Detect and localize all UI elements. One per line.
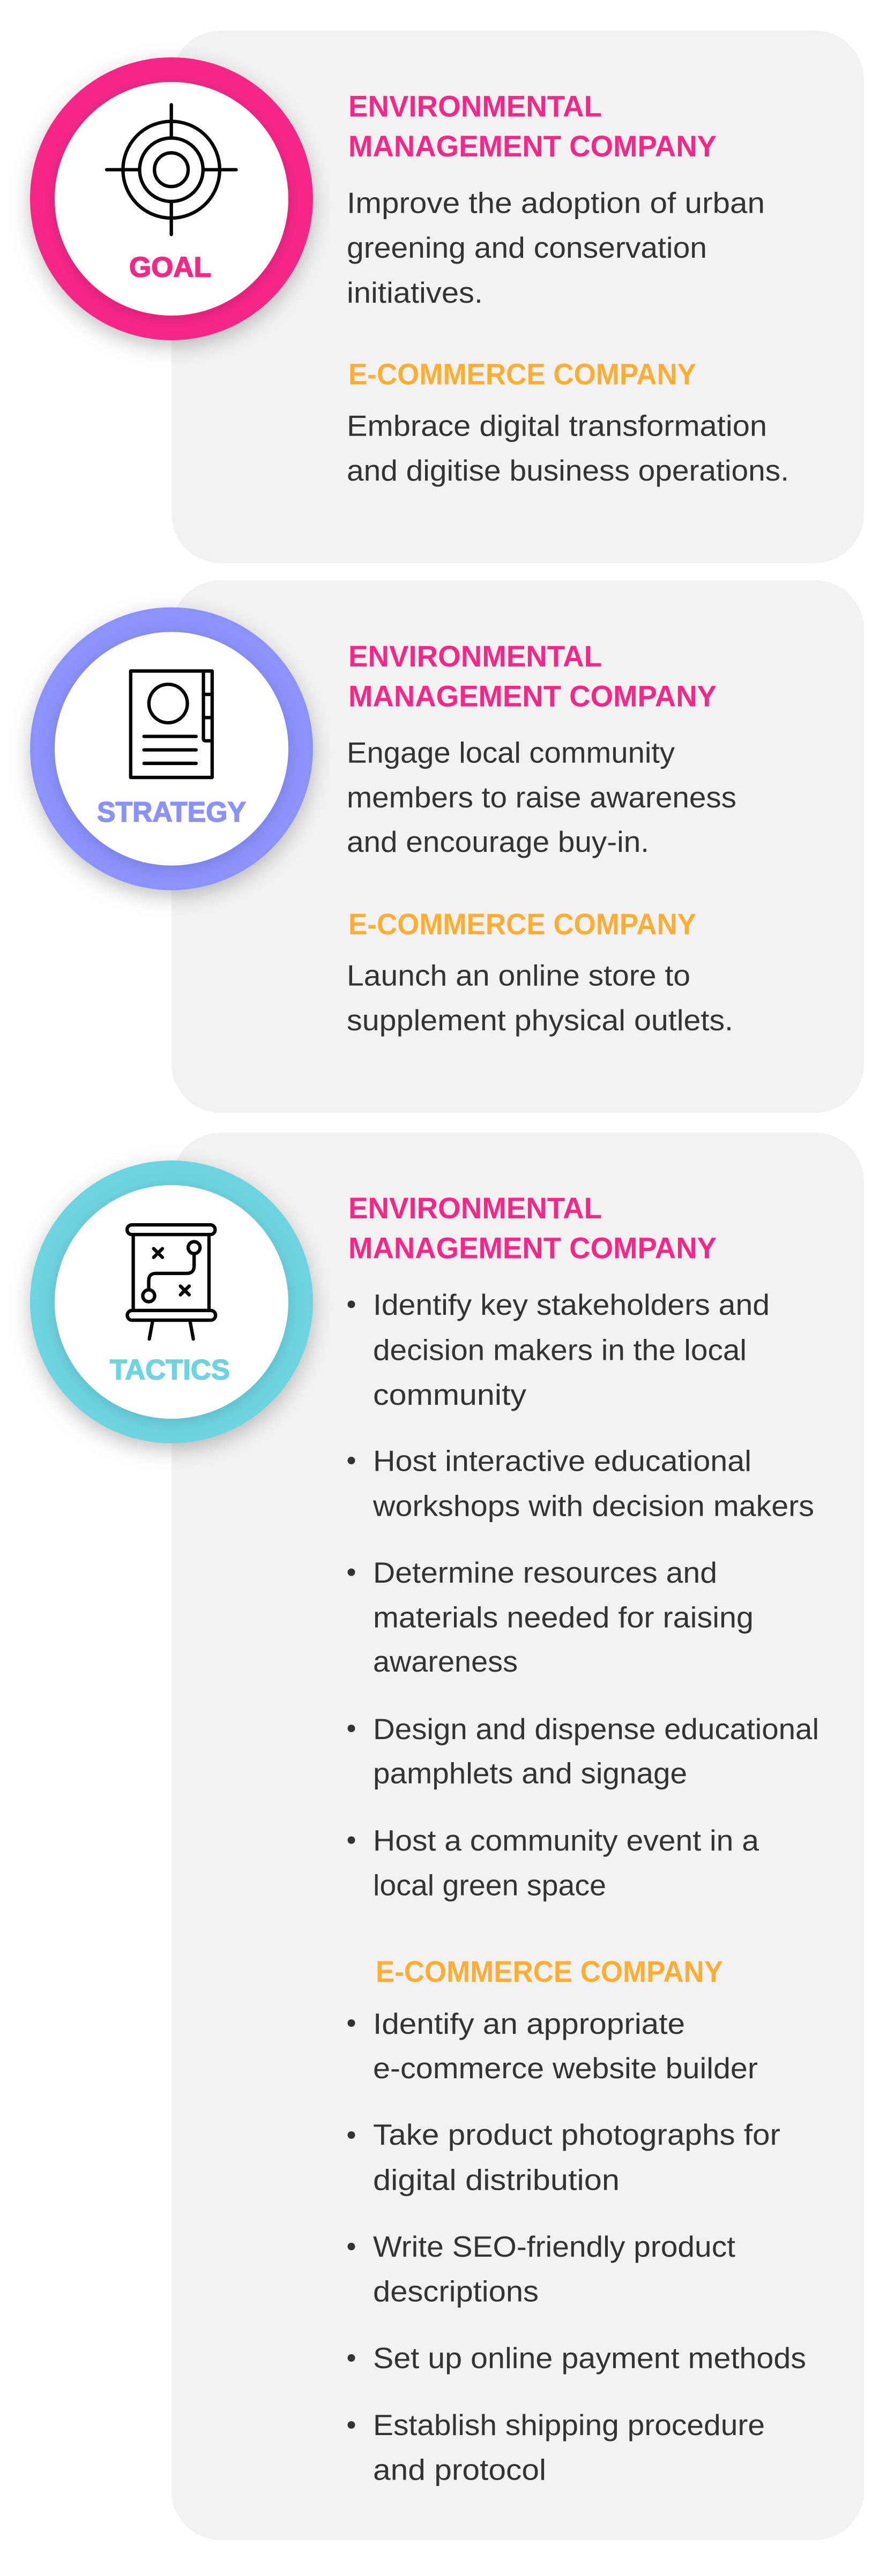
list item: community event	[347, 1824, 759, 1902]
panel: goal	[30, 31, 864, 563]
text block: environmental goal: greening and conservation	[347, 231, 707, 264]
heading: environmental management company	[348, 1191, 717, 1264]
text block: e-commerce strategy: supplement physical outlets.	[347, 1004, 733, 1037]
list item: resources: awareness	[373, 1645, 518, 1678]
badge: strategy	[30, 608, 313, 890]
list item: pamphlets: pamphlets and signage	[373, 1756, 687, 1789]
list item: payment methods: Set up online payment methods	[373, 2341, 806, 2375]
list item: descriptions	[347, 2230, 735, 2308]
list item: resources: Determine resources and	[373, 1556, 717, 1589]
heading: environmental management company	[348, 639, 717, 713]
panel: tactics	[30, 1133, 864, 2540]
heading: e-commerce company: E-COMMERCE COMPANY	[348, 357, 696, 391]
label: TACTICS: TACTICS	[110, 1354, 230, 1386]
panel background: tactics	[172, 1133, 864, 2540]
heading: environmental management company: ENVIRONMENTAL	[348, 639, 602, 673]
list: environmental tactics	[347, 1288, 819, 1902]
list item: shipping: and protocol	[373, 2453, 546, 2486]
list item: photographs: Take product photographs for	[373, 2118, 780, 2151]
text block: environmental goal: initiatives.	[347, 276, 483, 309]
text block: e-commerce goal	[347, 409, 789, 487]
list item: stakeholders: decision makers in the local	[373, 1333, 747, 1366]
list item: pamphlets	[347, 1712, 819, 1789]
badge: tactics	[30, 1160, 313, 1443]
heading: environmental management company: ENVIRONMENTAL	[348, 1191, 602, 1225]
badge ring: strategy	[30, 608, 313, 890]
list: e-commerce tactics	[347, 2007, 806, 2486]
text block: e-commerce goal: Embrace digital transformation	[347, 409, 767, 443]
text block: environmental goal	[347, 186, 765, 309]
list item: website builder: e-commerce website builder	[373, 2051, 758, 2085]
badge ring: goal	[30, 57, 313, 340]
list item: shipping: Establish shipping procedure	[373, 2408, 765, 2442]
badge disc: strategy	[55, 632, 288, 866]
badge disc: goal	[55, 82, 288, 316]
heading: environmental management company: MANAGEMENT COMPANY	[348, 129, 717, 163]
list item: pamphlets: Design and dispense educational	[373, 1712, 819, 1746]
list item: descriptions: Write SEO-friendly product	[373, 2230, 735, 2263]
list item: shipping	[347, 2408, 765, 2486]
text block: e-commerce strategy: Launch an online store to	[347, 959, 690, 992]
text block: e-commerce goal: and digitise business operations.	[347, 454, 789, 487]
panel background: strategy	[172, 580, 864, 1113]
panel: strategy	[30, 580, 864, 1113]
list item: descriptions: descriptions	[373, 2275, 539, 2308]
list item: community event: Host a community event in a	[373, 1824, 759, 1857]
icon: target	[107, 104, 236, 235]
heading: environmental management company: MANAGEMENT COMPANY	[348, 1231, 717, 1264]
icon: document	[131, 671, 212, 777]
list item: resources	[347, 1556, 754, 1678]
list item: website builder	[347, 2007, 758, 2085]
list item: stakeholders: community	[373, 1378, 527, 1411]
heading: environmental management company: ENVIRONMENTAL	[348, 89, 602, 123]
text block: environmental strategy	[347, 736, 736, 858]
text block: environmental goal: Improve the adoption of urban	[347, 186, 765, 220]
list item: resources: materials needed for raising	[373, 1601, 754, 1634]
list item: workshops: Host interactive educational	[373, 1444, 751, 1478]
list item: stakeholders: Identify key stakeholders and	[373, 1288, 770, 1321]
heading: e-commerce company: E-COMMERCE COMPANY	[348, 907, 696, 941]
heading: e-commerce company: E-COMMERCE COMPANY	[376, 1955, 723, 1988]
icon: strategy board	[127, 1225, 215, 1339]
list item: workshops: workshops with decision makers	[372, 1489, 814, 1523]
text block: environmental strategy: Engage local community	[347, 736, 675, 769]
list item: stakeholders	[347, 1288, 770, 1411]
list item: workshops	[347, 1444, 814, 1523]
panel background: goal	[172, 31, 864, 563]
text block: environmental strategy: members to raise awareness	[347, 781, 736, 814]
text block: environmental strategy: and encourage buy-in.	[347, 825, 649, 858]
heading: environmental management company	[348, 89, 717, 163]
badge disc: tactics	[55, 1185, 288, 1419]
label: STRATEGY: STRATEGY	[97, 796, 246, 828]
list item: photographs: digital distribution	[373, 2163, 620, 2197]
list item: community event: local green space	[373, 1869, 606, 1902]
text block: e-commerce strategy	[347, 959, 733, 1037]
list item: website builder: Identify an appropriate	[373, 2007, 685, 2040]
list item: photographs	[347, 2118, 780, 2197]
badge ring: tactics	[30, 1160, 313, 1443]
label: GOAL: GOAL	[129, 252, 211, 283]
badge: goal	[30, 57, 313, 340]
heading: environmental management company: MANAGEMENT COMPANY	[348, 679, 717, 713]
